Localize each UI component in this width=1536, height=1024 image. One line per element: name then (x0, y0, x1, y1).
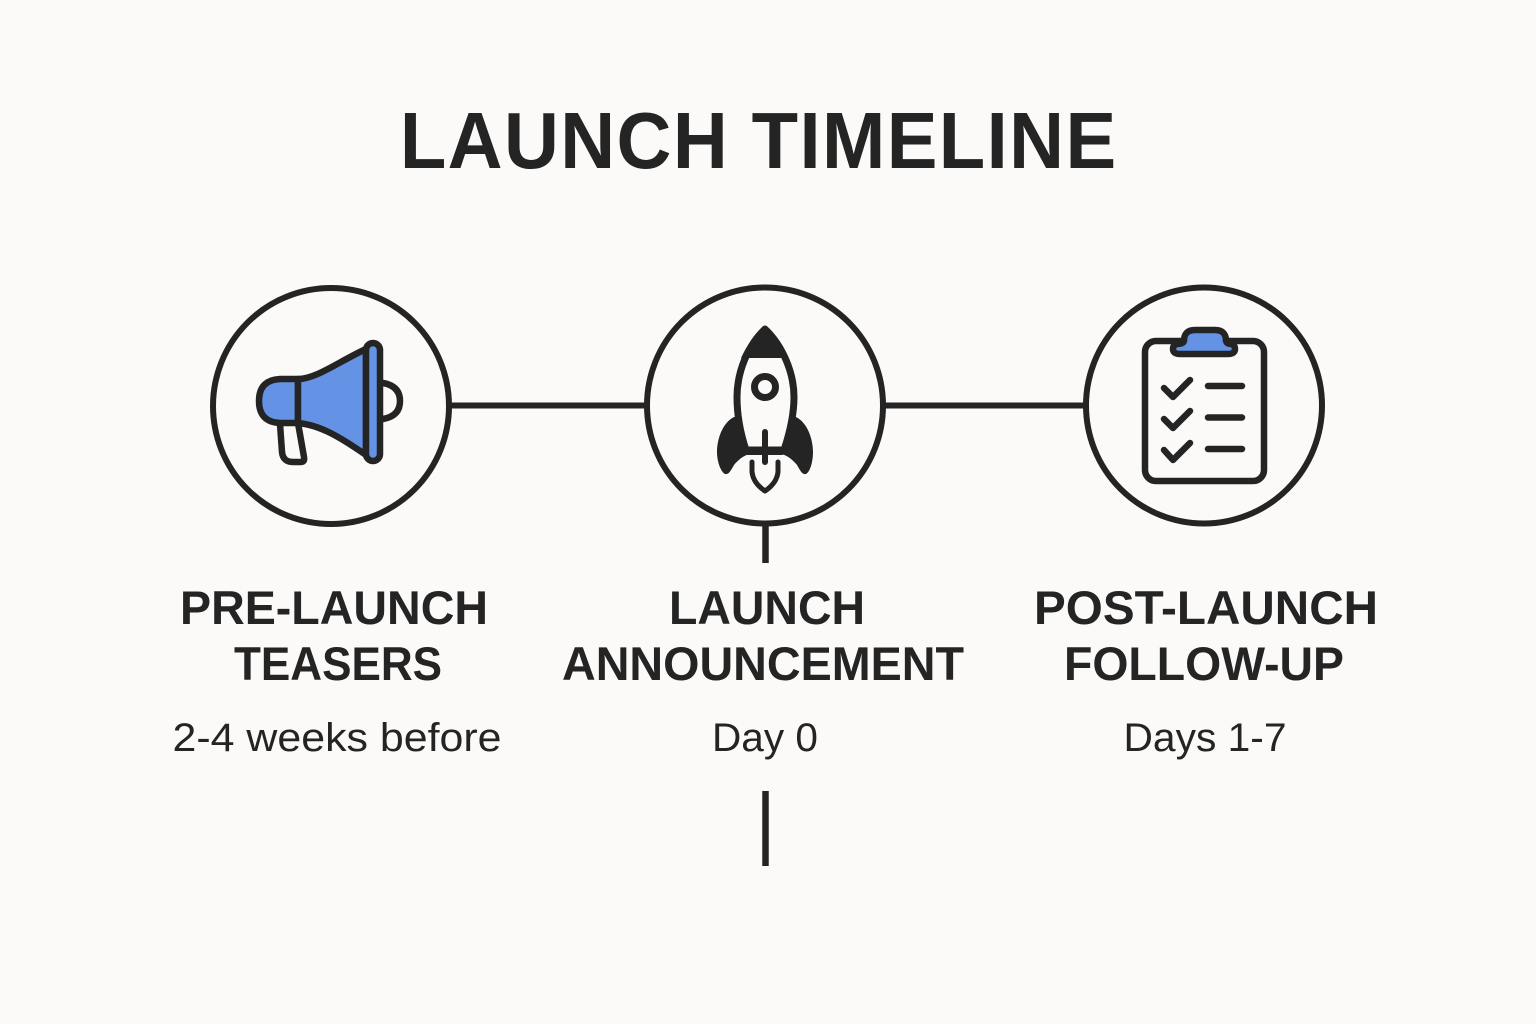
label: launch announcement: Day 0 (712, 716, 818, 760)
label: pre-launch teasers: TEASERS (234, 637, 442, 690)
title: LAUNCH TIMELINE (400, 95, 1116, 185)
label: post-launch follow-up: FOLLOW-UP (1064, 637, 1344, 690)
label: launch announcement: ANNOUNCEMENT (562, 637, 964, 690)
connector: launch circle to label (762, 524, 769, 563)
connector: pre-launch to launch (449, 402, 647, 408)
label: pre-launch teasers: PRE-LAUNCH (180, 581, 488, 634)
label: pre-launch teasers (172, 581, 502, 760)
label: post-launch follow-up (1034, 581, 1378, 760)
connector: lower vertical stub (762, 791, 769, 866)
label: launch announcement (562, 581, 964, 760)
label: post-launch follow-up: POST-LAUNCH (1034, 581, 1378, 634)
icon: megaphone in circle (213, 288, 449, 524)
connector: launch to post-launch (884, 402, 1085, 408)
icon: rocket in circle (647, 288, 883, 524)
label: pre-launch teasers: 2-4 weeks before (172, 716, 502, 760)
label: launch announcement: LAUNCH (669, 581, 865, 634)
label: post-launch follow-up: Days 1-7 (1124, 716, 1286, 760)
icon: clipboard checklist in circle (1086, 288, 1322, 524)
